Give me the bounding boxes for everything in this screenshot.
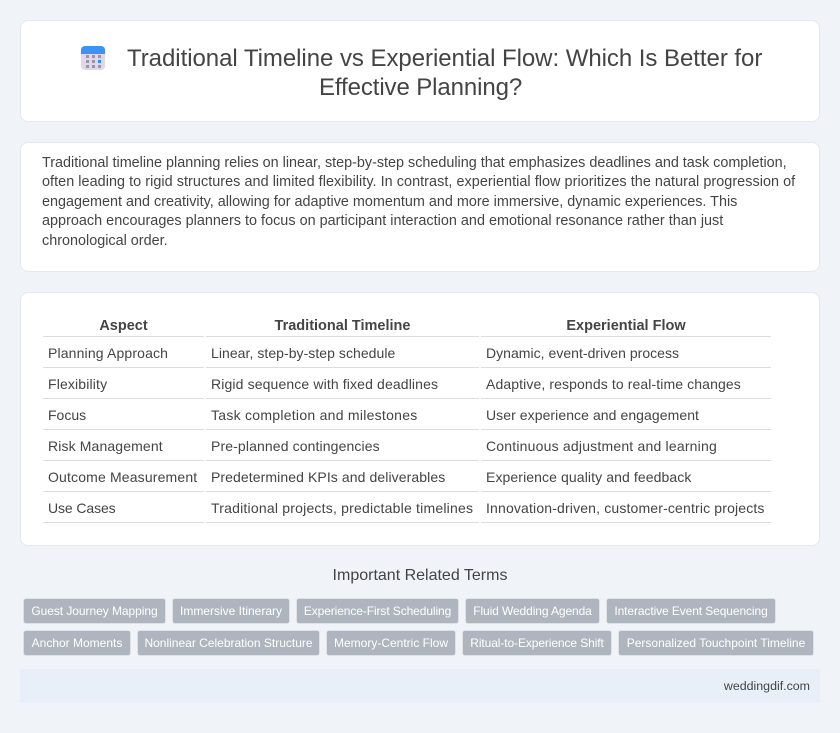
comparison table: Innovation-driven, customer-centric projects — [486, 500, 765, 516]
panel: introduction — [20, 142, 820, 272]
comparison table: User experience and engagement — [486, 407, 699, 423]
tag — [606, 598, 776, 624]
title: Effective Planning? — [319, 74, 522, 101]
comparison table: Aspect — [99, 318, 148, 334]
row: use cases — [48, 500, 765, 516]
header panel — [20, 20, 820, 122]
title — [127, 45, 762, 101]
comparison table: Experience quality and feedback — [486, 469, 691, 485]
tag — [23, 598, 166, 624]
tag: Guest Journey Mapping — [31, 604, 158, 618]
tag — [137, 630, 320, 656]
intro paragraph: Traditional timeline planning relies on linear, step-by-step scheduling that emphasizes deadlines and task completion, — [42, 154, 787, 170]
comparison table: Traditional projects, predictable timelines — [211, 500, 473, 516]
tag — [462, 630, 612, 656]
comparison table: Focus — [48, 407, 86, 423]
tag: Interactive Event Sequencing — [614, 604, 768, 618]
intro paragraph: often leading to rigid structures and limited flexibility. In contrast, experiential flow prioritizes the natural progression of — [42, 174, 795, 190]
comparison table: Dynamic, event-driven process — [486, 345, 679, 361]
tag — [618, 630, 814, 656]
footer bar — [20, 669, 820, 703]
row: risk management — [48, 438, 717, 454]
table rules — [43, 336, 771, 523]
comparison table: Rigid sequence with fixed deadlines — [211, 376, 438, 392]
row: planning approach — [48, 345, 679, 361]
tag — [23, 630, 131, 656]
comparison table: Adaptive, responds to real-time changes — [486, 376, 741, 392]
comparison table: Use Cases — [48, 500, 116, 516]
intro paragraph: chronological order. — [42, 232, 168, 248]
comparison table: Risk Management — [48, 438, 163, 454]
icon: calendar — [81, 46, 105, 70]
tag — [296, 598, 459, 624]
footer source: weddingdif.com — [724, 679, 810, 693]
tag: Experience-First Scheduling — [304, 604, 451, 618]
tag: Personalized Touchpoint Timeline — [627, 636, 805, 650]
intro paragraph: approach encourages planners to focus on participant interaction and emotional resonance rather than just — [42, 213, 723, 229]
related terms heading: Important Related Terms — [333, 567, 507, 584]
row: outcome measurement — [48, 469, 692, 485]
title: Traditional Timeline vs Experiential Flow: Which Is Better for — [127, 45, 762, 72]
panel: comparison table — [20, 292, 820, 546]
intro paragraph: engagement and creativity, allowing for adaptive momentum and more immersive, dynamic experiences. This — [42, 194, 737, 210]
comparison table: Task completion and milestones — [211, 407, 418, 423]
tag — [172, 598, 290, 624]
comparison table: Continuous adjustment and learning — [486, 438, 717, 454]
tag: Anchor Moments — [32, 636, 122, 650]
tag: Nonlinear Celebration Structure — [144, 636, 313, 650]
tag: Immersive Itinerary — [180, 604, 282, 618]
tag — [465, 598, 600, 624]
comparison table: Pre-planned contingencies — [211, 438, 380, 454]
intro paragraph — [42, 154, 796, 248]
comparison table: Outcome Measurement — [48, 469, 197, 485]
tag: Ritual-to-Experience Shift — [470, 636, 604, 650]
row: flexibility — [48, 376, 741, 392]
tag — [326, 630, 456, 656]
comparison table: Planning Approach — [48, 345, 168, 361]
comparison table: Linear, step-by-step schedule — [211, 345, 395, 361]
row: focus — [48, 407, 699, 423]
table header — [99, 318, 686, 334]
comparison table: Experiential Flow — [566, 318, 686, 334]
comparison table: Predetermined KPIs and deliverables — [211, 469, 445, 485]
tag: Fluid Wedding Agenda — [473, 604, 592, 618]
comparison table: Traditional Timeline — [275, 318, 410, 334]
tag: Memory-Centric Flow — [334, 636, 448, 650]
comparison table: Flexibility — [48, 376, 107, 392]
